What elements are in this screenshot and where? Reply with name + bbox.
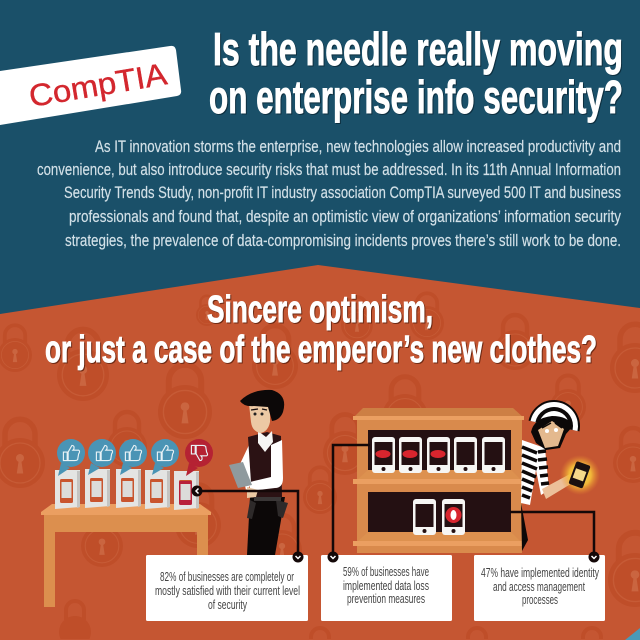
callout: 82% satisfied: of security [208,597,247,612]
callout: 59% data loss prevention: 59% of businesses have [343,564,429,579]
intro paragraph [37,137,621,250]
connector line: data loss prevention [333,445,370,556]
callout: 59% data loss prevention [321,555,452,621]
icon: thumbs up bubbles [57,439,179,476]
panel: orange lower section [0,265,640,640]
product boxes with feedback bubbles [55,439,213,510]
connector line: identity management [510,512,594,556]
character: thief [521,395,600,551]
corner accent [625,628,640,640]
callout: 47% identity and access: and access management [493,579,585,594]
background lock pattern [0,293,640,639]
phones with data-loss icons [372,437,505,473]
callout: 82% satisfied: mostly satisfied with their current level [155,583,300,598]
connector end markers [292,552,600,562]
connector line: customer satisfaction [192,486,298,556]
phones with identity icon [413,499,465,535]
callout: 47% identity and access: processes [522,592,558,607]
title [209,23,623,123]
table [41,504,211,607]
callout: 59% data loss prevention: prevention measures [347,591,425,606]
callout: 82% satisfied: 82% of businesses are completely or [160,569,294,584]
section heading [45,289,597,371]
section heading: Sincere optimism, [207,289,433,331]
callout: 82% satisfied [146,555,308,621]
shelf unit [353,408,524,553]
logo: CompTIA: CompTIA [26,56,170,114]
icon: thumbs down bubble [185,439,213,476]
character: man with clipboard [229,390,288,555]
thief striped beanie [529,395,585,431]
callout: 47% identity and access [474,555,605,621]
callout: 59% data loss prevention: implemented data loss [343,578,429,593]
logo: CompTIA [0,46,181,125]
